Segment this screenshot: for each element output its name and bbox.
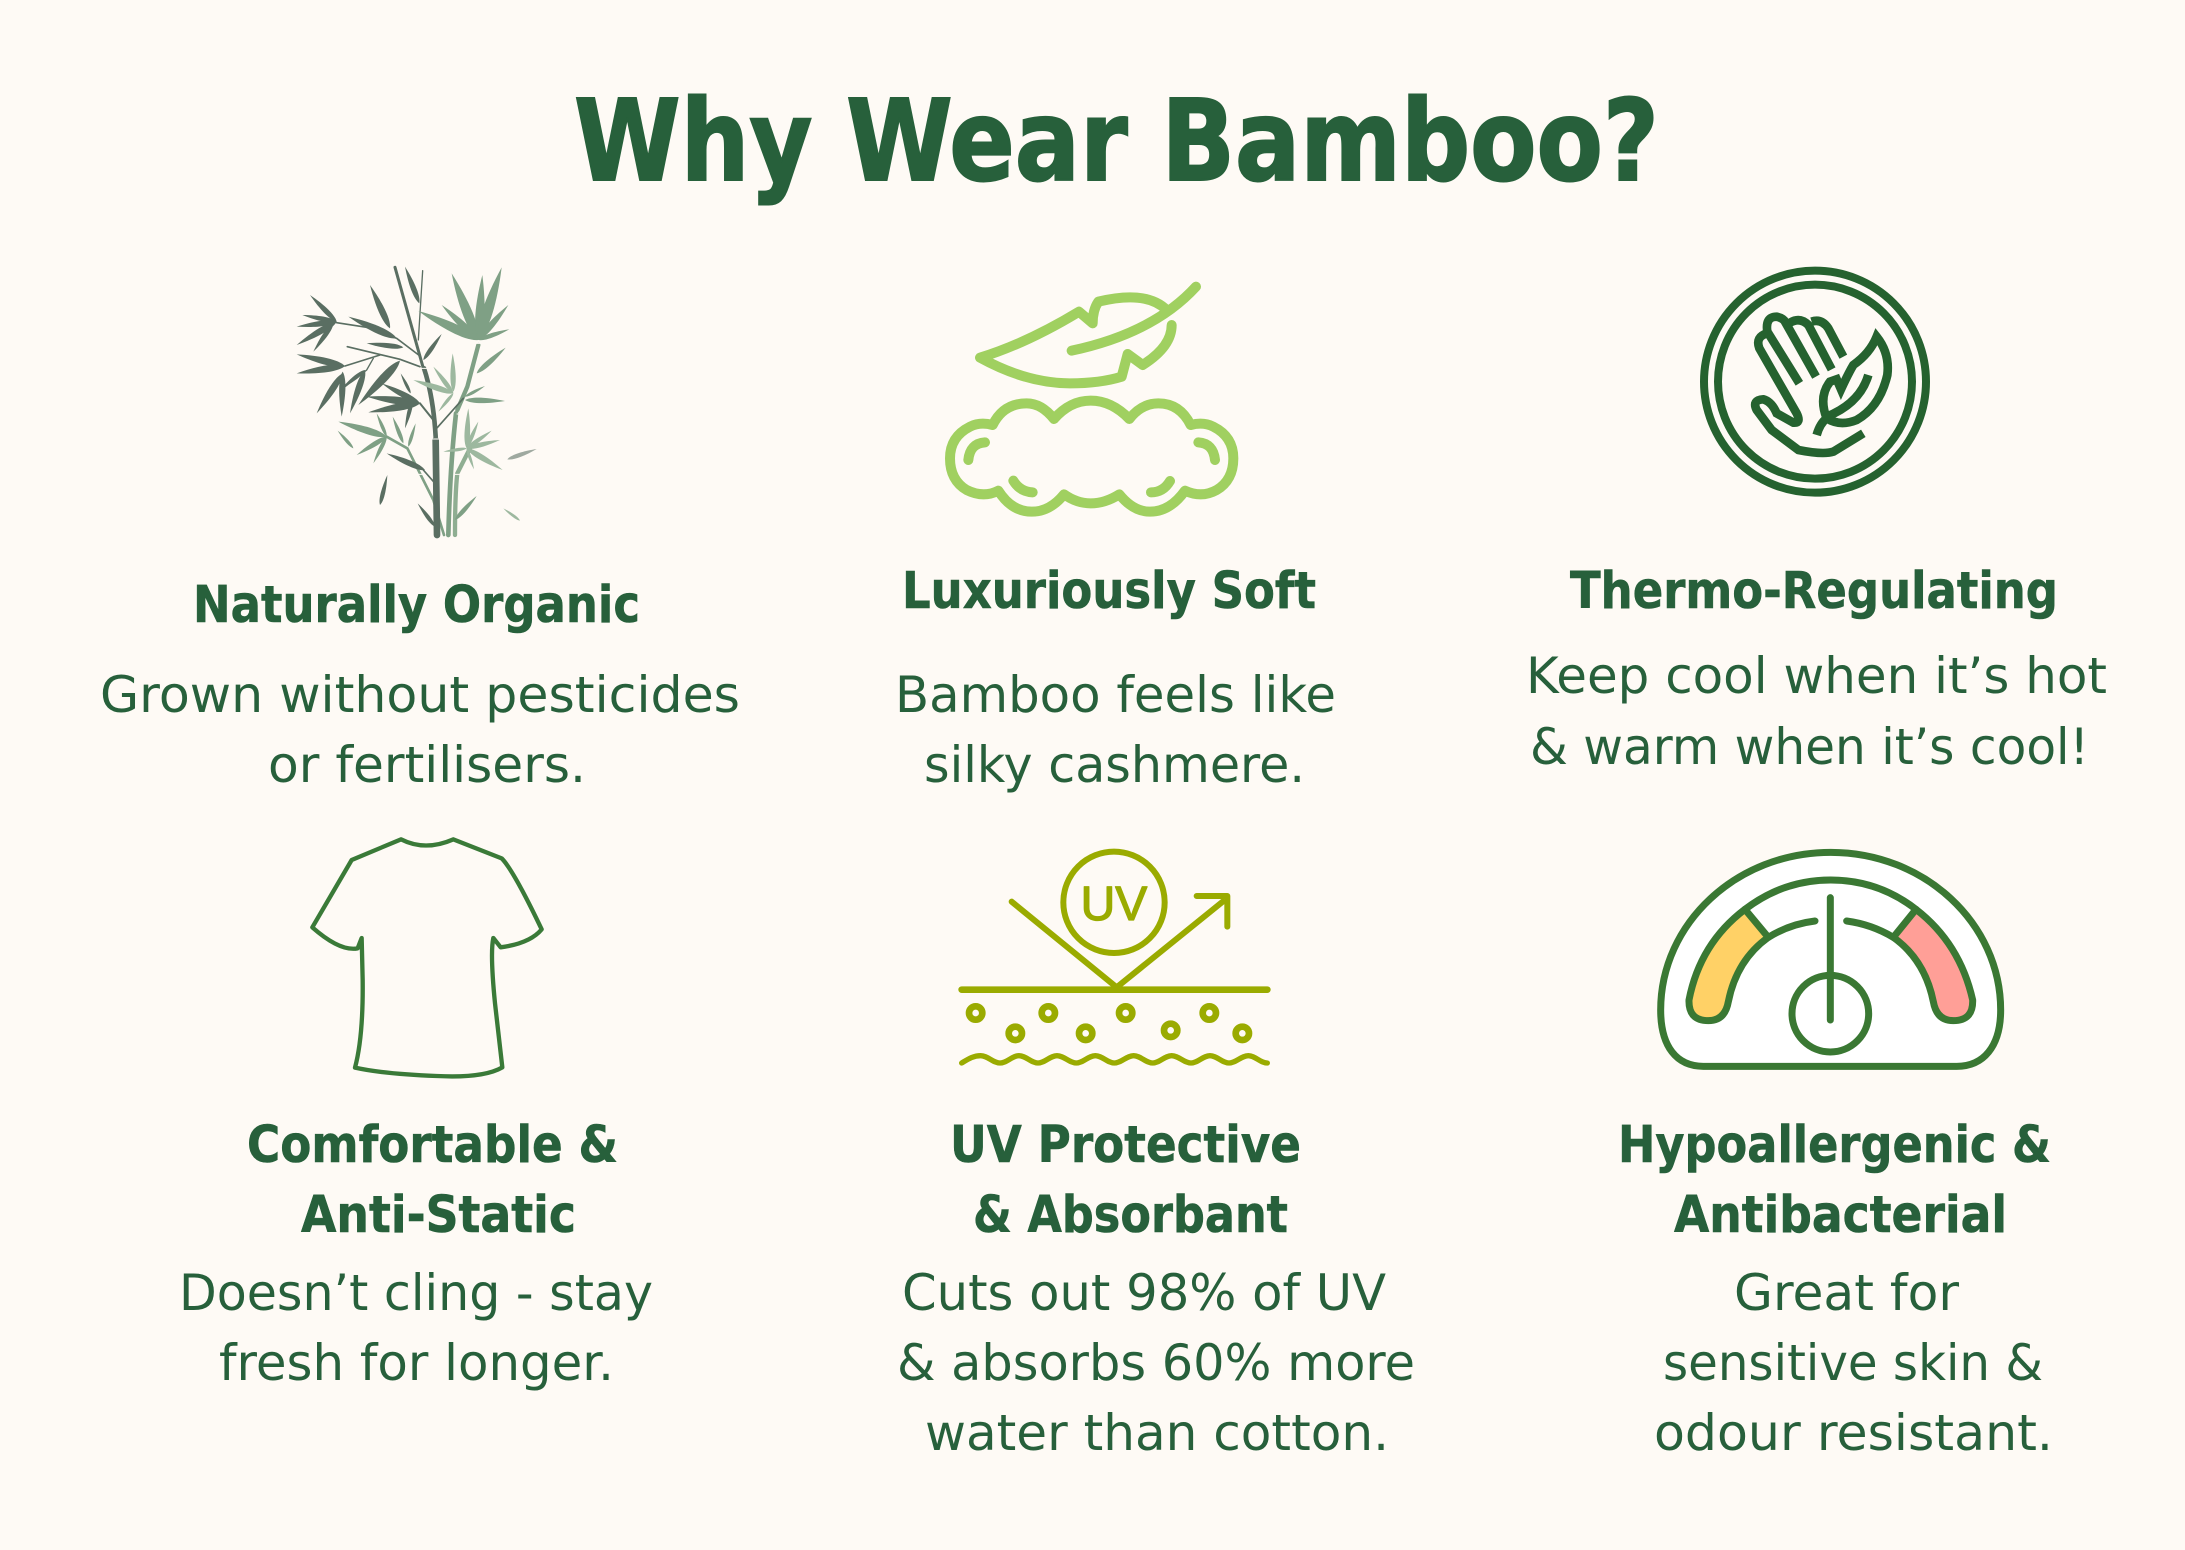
description xyxy=(897,1264,1415,1462)
description: & warm when it’s cool! xyxy=(1530,718,2089,776)
description: Great for xyxy=(1734,1264,1959,1322)
heading: Luxuriously Soft xyxy=(902,562,1316,621)
description xyxy=(100,666,740,794)
description: & absorbs 60% more xyxy=(897,1334,1415,1392)
heading: Thermo-Regulating xyxy=(1570,562,2058,621)
description xyxy=(895,666,1336,794)
panel: Comfortable & Anti-Static xyxy=(179,839,653,1392)
panel: Luxuriously Soft xyxy=(895,287,1336,794)
icon: t-shirt xyxy=(312,839,542,1076)
description xyxy=(1526,647,2107,776)
panel: UV Protective & Absorbant xyxy=(897,852,1415,1462)
description: sensitive skin & xyxy=(1663,1334,2043,1392)
description: fresh for longer. xyxy=(219,1334,614,1392)
heading: Hypoallergenic & xyxy=(1618,1116,2051,1175)
icon: UV reflection xyxy=(962,852,1267,1063)
description xyxy=(1654,1264,2053,1462)
description: Grown without pesticides xyxy=(100,666,740,724)
panel: Hypoallergenic & Antibacterial xyxy=(1618,852,2053,1462)
heading xyxy=(1618,1116,2051,1245)
description: Keep cool when it’s hot xyxy=(1526,647,2107,705)
heading xyxy=(247,1116,618,1245)
heading: & Absorbant xyxy=(973,1186,1288,1245)
description: silky cashmere. xyxy=(924,736,1305,794)
description: odour resistant. xyxy=(1654,1404,2053,1462)
heading: Anti-Static xyxy=(301,1186,576,1245)
panel: Thermo-Regulating xyxy=(1526,271,2107,776)
panel: Naturally Organic xyxy=(100,266,740,794)
heading xyxy=(950,1116,1301,1245)
falling leaf xyxy=(507,447,537,461)
description: Cuts out 98% of UV xyxy=(902,1264,1386,1322)
heading: UV Protective xyxy=(950,1116,1301,1175)
icon: hand and leaf in circle xyxy=(1704,271,1926,493)
description: water than cotton. xyxy=(925,1404,1389,1462)
title: Why Wear Bamboo? xyxy=(574,77,1659,207)
icon: feather over cloud xyxy=(950,287,1233,512)
description: Doesn’t cling - stay xyxy=(179,1264,653,1322)
icon: bamboo plant xyxy=(295,266,537,535)
description: Bamboo feels like xyxy=(895,666,1336,724)
heading: Naturally Organic xyxy=(193,576,640,635)
description: or fertilisers. xyxy=(268,736,586,794)
heading: Antibacterial xyxy=(1674,1186,2007,1245)
heading: Comfortable & xyxy=(247,1116,618,1175)
icon: gauge xyxy=(1661,852,2001,1066)
description xyxy=(179,1264,653,1392)
icon: UV reflection: UV xyxy=(1081,877,1148,931)
